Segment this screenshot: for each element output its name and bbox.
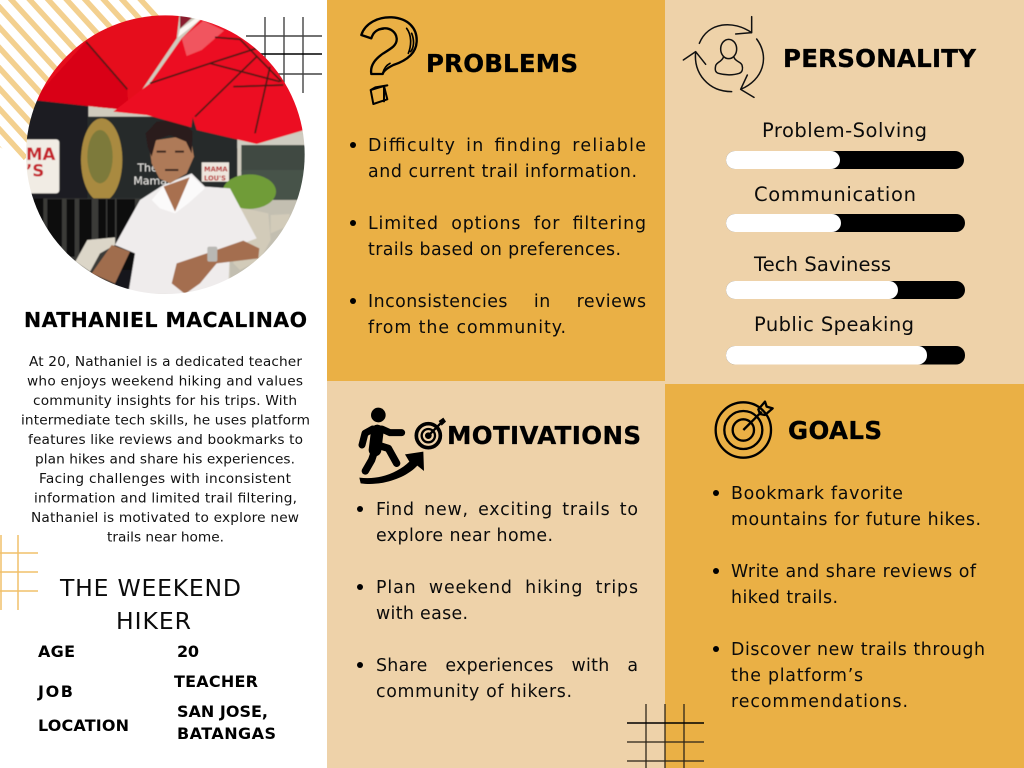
skill: communication: Communication [754, 183, 916, 206]
persona facts table: 20 [177, 642, 199, 661]
biography text: community insights for his trips. With [33, 393, 297, 409]
skill: public speaking [726, 313, 965, 364]
list: goals: Write and share reviews of [731, 562, 977, 582]
portrait photo [18, 10, 310, 300]
portrait photo: LOU'S [204, 174, 226, 182]
list: motivations: community of hikers. [376, 682, 572, 702]
list: problems: Inconsistencies in reviews [368, 292, 646, 312]
list: problems: Limited options for filtering [368, 214, 646, 234]
icon: hiker climbing toward target [359, 408, 446, 484]
portrait photo: The [136, 162, 158, 175]
heading: motivations: MOTIVATIONS [447, 421, 641, 450]
persona title [59, 574, 241, 635]
persona facts table: LOCATION [38, 716, 129, 735]
skill: problem-solving: Problem-Solving [762, 119, 927, 142]
list: problems: from the community. [368, 318, 566, 338]
list: goals: Bookmark favorite [731, 484, 903, 504]
panel: goals background [665, 384, 1024, 768]
biography text: features like reviews and bookmarks to [28, 432, 303, 448]
portrait photo: Mama [133, 174, 167, 187]
skill: public speaking: Public Speaking [754, 313, 914, 336]
persona facts table [37, 642, 276, 743]
decorative striped triangle [0, 0, 159, 160]
skill: tech saviness [726, 253, 965, 299]
persona facts table: SAN JOSE, [177, 702, 268, 721]
panel: left profile background [0, 0, 327, 768]
list: goals: mountains for future hikes. [731, 510, 981, 530]
list: problems [350, 136, 646, 338]
biography text: Facing challenges with inconsistent [39, 471, 292, 487]
icon: target with arrow [716, 402, 773, 458]
list: motivations: Find new, exciting trails to [376, 500, 638, 520]
persona facts table: TEACHER [174, 672, 258, 691]
list: goals: recommendations. [731, 692, 908, 712]
icon: person in rotating arrows [683, 17, 763, 97]
list: problems: and current trail information. [368, 162, 637, 182]
decorative grid top right of photo [246, 17, 322, 93]
biography text: information and limited trail filtering, [34, 490, 297, 506]
persona title: HIKER [116, 607, 191, 635]
biography text: plan hikes and share his experiences. [35, 452, 295, 468]
heading: problems: PROBLEMS [426, 49, 578, 78]
list: motivations: Plan weekend hiking trips [376, 578, 638, 598]
persona facts table: JOB [37, 682, 73, 701]
portrait photo: ’S [26, 162, 44, 181]
skill: tech saviness: Tech Saviness [753, 253, 891, 276]
biography text: At 20, Nathaniel is a dedicated teacher [29, 354, 302, 370]
list: goals: Discover new trails through [731, 640, 985, 660]
biography text: intermediate tech skills, he uses platform [21, 412, 310, 428]
decorative bottom grid [627, 704, 704, 768]
list: goals [713, 484, 985, 712]
biography text: who enjoys weekend hiking and values [27, 374, 303, 390]
skill: problem-solving [726, 119, 964, 169]
heading: personality: PERSONALITY [783, 44, 976, 73]
panel: problems background [327, 0, 665, 381]
name heading: NATHANIEL MACALINAO [24, 308, 307, 332]
portrait photo: MA [26, 145, 56, 164]
list: motivations: explore near home. [376, 526, 553, 546]
persona title: THE WEEKEND [59, 574, 241, 602]
list: motivations: Share experiences with a [376, 656, 638, 676]
decorative orange grid [0, 535, 38, 610]
panel: personality background [665, 0, 1024, 384]
list: problems: trails based on preferences. [368, 240, 621, 260]
list: motivations [357, 500, 638, 702]
list: motivations: with ease. [376, 604, 468, 624]
icon: question mark [361, 17, 417, 104]
skill: communication [726, 183, 965, 232]
biography text: trails near home. [107, 530, 224, 546]
biography text [21, 354, 310, 546]
list: goals: the platform’s [731, 666, 863, 686]
panel: motivations background [327, 381, 665, 768]
persona facts table: BATANGAS [177, 724, 276, 743]
biography text: Nathaniel is motivated to explore new [31, 510, 299, 526]
list: problems: Difficulty in finding reliable [368, 136, 646, 156]
portrait photo: MAMA [204, 166, 228, 174]
heading: goals: GOALS [788, 416, 882, 445]
persona facts table: AGE [38, 642, 75, 661]
list: goals: hiked trails. [731, 588, 838, 608]
